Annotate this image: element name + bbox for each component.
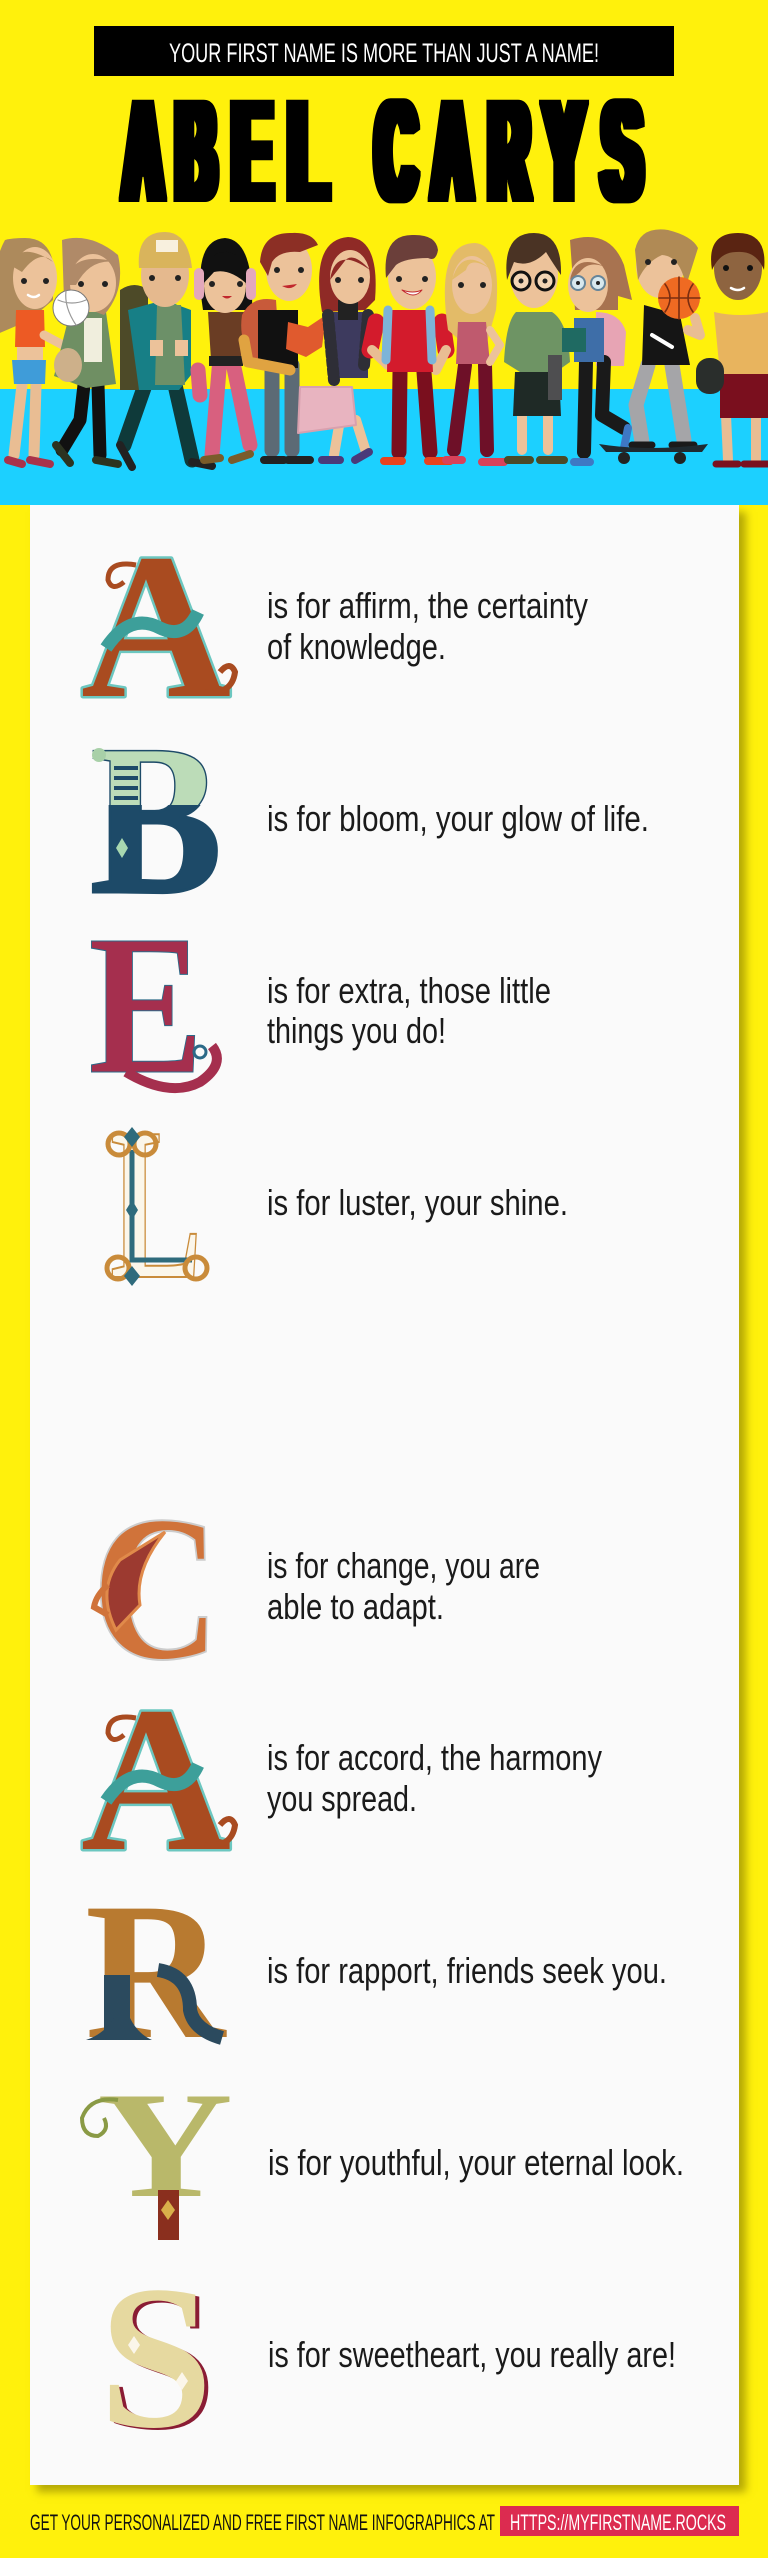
title: ABEL CARYS bbox=[124, 70, 642, 231]
person 12: boy with tank top bbox=[696, 233, 768, 464]
text: E line: things you do! bbox=[267, 1010, 446, 1051]
text: C line: able to adapt. bbox=[267, 1586, 444, 1627]
icon: ornate letter A: A bbox=[81, 1664, 231, 1894]
text: A line bbox=[267, 1737, 603, 1819]
text: A line: is for accord, the harmony bbox=[267, 1737, 603, 1778]
text: L line: is for luster, your shine. bbox=[267, 1182, 568, 1223]
person 6: girl with striped sweater and bag bbox=[298, 237, 376, 460]
icon: ornate letter Y bbox=[82, 2061, 233, 2240]
illustration: group of twelve students bbox=[0, 229, 768, 467]
row S: sweetheart bbox=[99, 2244, 676, 2473]
text: A line: you spread. bbox=[267, 1778, 417, 1819]
title: ABEL CARYS: Y bbox=[544, 72, 584, 231]
text: A line bbox=[267, 585, 589, 667]
person 3: boy with cap and backpack bbox=[120, 232, 212, 467]
icon: ornate letter L bbox=[107, 1084, 207, 1325]
text: E line bbox=[267, 970, 551, 1051]
icon: ornate letter Y: Y bbox=[97, 2061, 233, 2229]
row R: rapport bbox=[85, 1863, 667, 2080]
heading: tagline bar bbox=[94, 26, 674, 76]
row E: extra bbox=[88, 895, 551, 1116]
icon: ornate letter A: A bbox=[81, 511, 231, 741]
row A: affirm bbox=[81, 511, 589, 741]
row L: luster bbox=[107, 1084, 568, 1325]
row Y: youthful bbox=[82, 2061, 684, 2240]
icon: ornate letter R: R bbox=[85, 1863, 227, 2080]
icon: ornate letter B bbox=[92, 748, 218, 894]
title: ABEL CARYS: A bbox=[433, 70, 471, 230]
text: B line: is for bloom, your glow of life. bbox=[267, 798, 649, 839]
panel: white content sheet bbox=[30, 505, 739, 2485]
icon: ornate letter E: E bbox=[88, 895, 204, 1116]
title: ABEL CARYS: L bbox=[288, 72, 328, 231]
title: ABEL CARYS: A bbox=[124, 70, 162, 230]
person 11: skateboarder with basketball bbox=[599, 229, 708, 464]
row A: accord bbox=[81, 1664, 603, 1894]
title: ABEL CARYS: E bbox=[232, 72, 272, 231]
blue floor band bbox=[0, 389, 768, 505]
text: A line: is for affirm, the certainty bbox=[267, 585, 589, 626]
person 2: girl with volleyball bbox=[53, 238, 120, 464]
icon: ornate letter S: S bbox=[99, 2244, 213, 2471]
person 8: blonde girl bbox=[445, 243, 504, 462]
text: C line bbox=[267, 1545, 540, 1627]
text: A line: of knowledge. bbox=[267, 626, 446, 667]
title: ABEL CARYS: R bbox=[489, 71, 529, 230]
icon: ornate letter C: C bbox=[92, 1473, 220, 1703]
title: ABEL CARYS: B bbox=[176, 71, 216, 230]
person 10: girl with ponytail bbox=[562, 237, 632, 462]
icon: ornate letter B: B bbox=[90, 700, 222, 939]
person 4: girl with headphones bbox=[194, 238, 256, 460]
footer: GET YOUR PERSONALIZED AND FREE FIRST NAME INFOGRAPHICS AT bbox=[30, 2510, 495, 2535]
row C: change bbox=[92, 1473, 540, 1703]
title: ABEL CARYS: S bbox=[602, 72, 642, 231]
person 9: boy with glasses bbox=[504, 233, 570, 460]
text: C line: is for change, you are bbox=[267, 1545, 540, 1586]
row B: bloom bbox=[92, 748, 646, 894]
icon: ornate letter S: S bbox=[103, 2246, 217, 2473]
person 1: girl in orange top bbox=[0, 238, 72, 464]
person 5: boy with book bbox=[241, 233, 326, 460]
text: R line: is for rapport, friends seek you. bbox=[267, 1950, 667, 1991]
person 7: boy in red shirt bbox=[370, 235, 450, 461]
title: ABEL CARYS: C bbox=[376, 71, 416, 230]
icon: ornate letter B: B bbox=[90, 700, 222, 939]
icon: ornate letter L: L bbox=[110, 1084, 202, 1325]
text: E line: is for extra, those little bbox=[267, 970, 551, 1011]
